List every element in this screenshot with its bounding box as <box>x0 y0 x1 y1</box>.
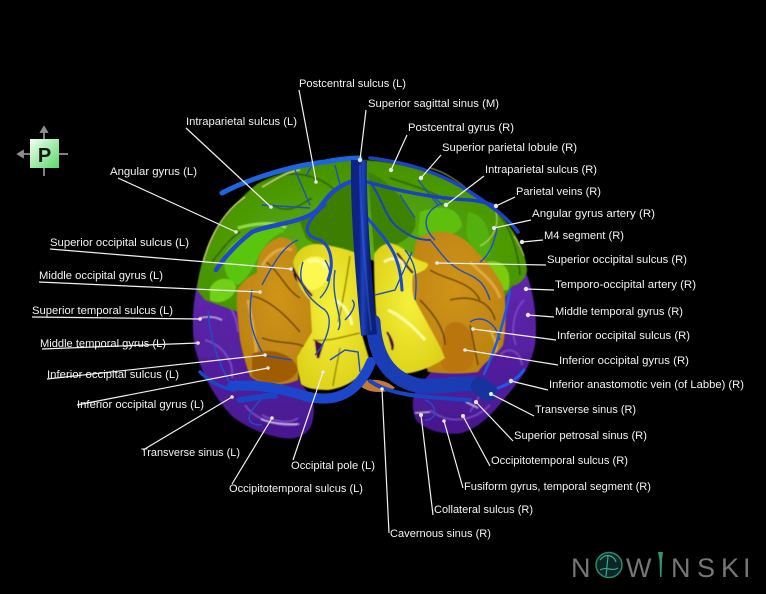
transverse and sagittal sinuses <box>232 160 488 400</box>
label: Intraparietal sulcus (R): Intraparietal sulcus (R) <box>485 164 597 176</box>
label: Superior sagittal sinus (M): Superior sagittal sinus (M) <box>368 98 499 110</box>
label: Occipitotemporal sulcus (R): Occipitotemporal sulcus (R) <box>491 455 628 467</box>
label: Intraparietal sulcus (L) <box>186 116 297 209</box>
label: Middle temporal gyrus (L): Middle temporal gyrus (L) <box>40 338 166 350</box>
label: Intraparietal sulcus (R) <box>444 164 597 207</box>
labels: right hemisphere <box>380 122 744 540</box>
label: Postcentral gyrus (R): Postcentral gyrus (R) <box>408 122 514 134</box>
label: Fusiform gyrus, temporal segment (R): Fusiform gyrus, temporal segment (R) <box>464 481 651 493</box>
label: Inferior occipital gyrus (L) <box>77 366 270 411</box>
purple temporal lobes <box>193 268 536 439</box>
label: Occipitotemporal sulcus (L) <box>229 416 363 495</box>
label: Superior sagittal sinus (M) <box>358 98 499 162</box>
logo letters: N <box>571 553 590 583</box>
label: Angular gyrus (L) <box>110 166 238 234</box>
label: Parietal veins (R): Parietal veins (R) <box>516 186 601 198</box>
label: Inferior occipital gyrus (R): Inferior occipital gyrus (R) <box>559 355 689 367</box>
orange structure at the midline base <box>358 380 395 392</box>
label: Superior temporal sulcus (L): Superior temporal sulcus (L) <box>32 305 173 317</box>
label: Postcentral gyrus (R) <box>389 122 514 172</box>
label: Intraparietal sulcus (L): Intraparietal sulcus (L) <box>186 116 297 128</box>
label: Superior occipital sulcus (R) <box>435 254 687 266</box>
label: Occipital pole (L): Occipital pole (L) <box>291 460 375 472</box>
label: Superior parietal lobule (R) <box>419 142 577 180</box>
green parietal cortex <box>197 160 527 312</box>
label: Middle occipital gyrus (L) <box>39 270 262 294</box>
logo letters: I <box>743 553 751 583</box>
veins: superior surface and left branch <box>200 158 524 390</box>
small arteries and veins <box>208 165 500 425</box>
orientation cube: posterior view <box>18 127 68 176</box>
logo letters: N <box>671 553 690 583</box>
label: Collateral sulcus (R) <box>419 413 533 516</box>
label: Occipitotemporal sulcus (R) <box>461 414 628 467</box>
label: M4 segment (R) <box>520 230 624 244</box>
label: M4 segment (R): M4 segment (R) <box>544 230 624 242</box>
label: Inferior occipital sulcus (L) <box>47 353 267 381</box>
logo letters: W <box>626 553 652 583</box>
letter P: P <box>38 145 51 167</box>
logo figure I <box>658 552 663 577</box>
labels: left hemisphere and top <box>32 78 499 495</box>
label: Cavernous sinus (R) <box>380 387 491 540</box>
label: Temporo-occipital artery (R): Temporo-occipital artery (R) <box>555 279 696 291</box>
label: Superior occipital sulcus (R): Superior occipital sulcus (R) <box>547 254 687 266</box>
label: Occipitotemporal sulcus (L): Occipitotemporal sulcus (L) <box>229 483 363 495</box>
label: Cavernous sinus (R): Cavernous sinus (R) <box>390 528 491 540</box>
logo: NOWINSKI <box>571 552 751 583</box>
label: Inferior anastomotic vein (of Labbe) (R): Inferior anastomotic vein (of Labbe) (R) <box>549 379 744 391</box>
label: Superior occipital sulcus (L) <box>50 237 293 271</box>
label: Angular gyrus (L): Angular gyrus (L) <box>110 166 197 178</box>
yellow occipital gyri <box>293 243 445 390</box>
label: Inferior occipital sulcus (R): Inferior occipital sulcus (R) <box>557 330 690 342</box>
label: Fusiform gyrus, temporal segment (R) <box>442 419 651 493</box>
label: Middle temporal gyrus (R): Middle temporal gyrus (R) <box>555 306 683 318</box>
label: Transverse sinus (L) <box>141 395 240 459</box>
brain model <box>193 158 536 439</box>
label: Inferior occipital gyrus (L): Inferior occipital gyrus (L) <box>77 399 204 411</box>
label: Superior petrosal sinus (R): Superior petrosal sinus (R) <box>514 430 647 442</box>
label: Inferior occipital sulcus (L): Inferior occipital sulcus (L) <box>47 369 179 381</box>
label: Angular gyrus artery (R): Angular gyrus artery (R) <box>532 208 655 220</box>
cube face <box>30 139 59 168</box>
label: Transverse sinus (L): Transverse sinus (L) <box>141 447 240 459</box>
label: Superior petrosal sinus (R) <box>474 400 647 442</box>
label: Angular gyrus artery (R) <box>492 208 655 230</box>
label: Collateral sulcus (R): Collateral sulcus (R) <box>434 504 533 516</box>
label: Occipital pole (L) <box>291 370 375 472</box>
label: Middle occipital gyrus (L): Middle occipital gyrus (L) <box>39 270 163 282</box>
label: Inferior occipital gyrus (R) <box>463 348 689 367</box>
label: Superior parietal lobule (R): Superior parietal lobule (R) <box>442 142 577 154</box>
logo letters: S <box>697 553 715 583</box>
label: Transverse sinus (R) <box>489 392 636 416</box>
orange occipital gyri <box>237 232 506 384</box>
label: Transverse sinus (R): Transverse sinus (R) <box>535 404 636 416</box>
label: Inferior occipital sulcus (R) <box>471 327 690 342</box>
label: Parietal veins (R) <box>494 186 601 208</box>
logo brain emblem <box>596 552 622 578</box>
direction arrows <box>18 127 68 176</box>
label: Postcentral sulcus (L): Postcentral sulcus (L) <box>299 78 406 90</box>
label: Superior occipital sulcus (L): Superior occipital sulcus (L) <box>50 237 189 249</box>
label: Postcentral sulcus (L) <box>299 78 406 184</box>
logo letters: K <box>721 553 739 583</box>
label: Superior temporal sulcus (L) <box>32 305 202 321</box>
